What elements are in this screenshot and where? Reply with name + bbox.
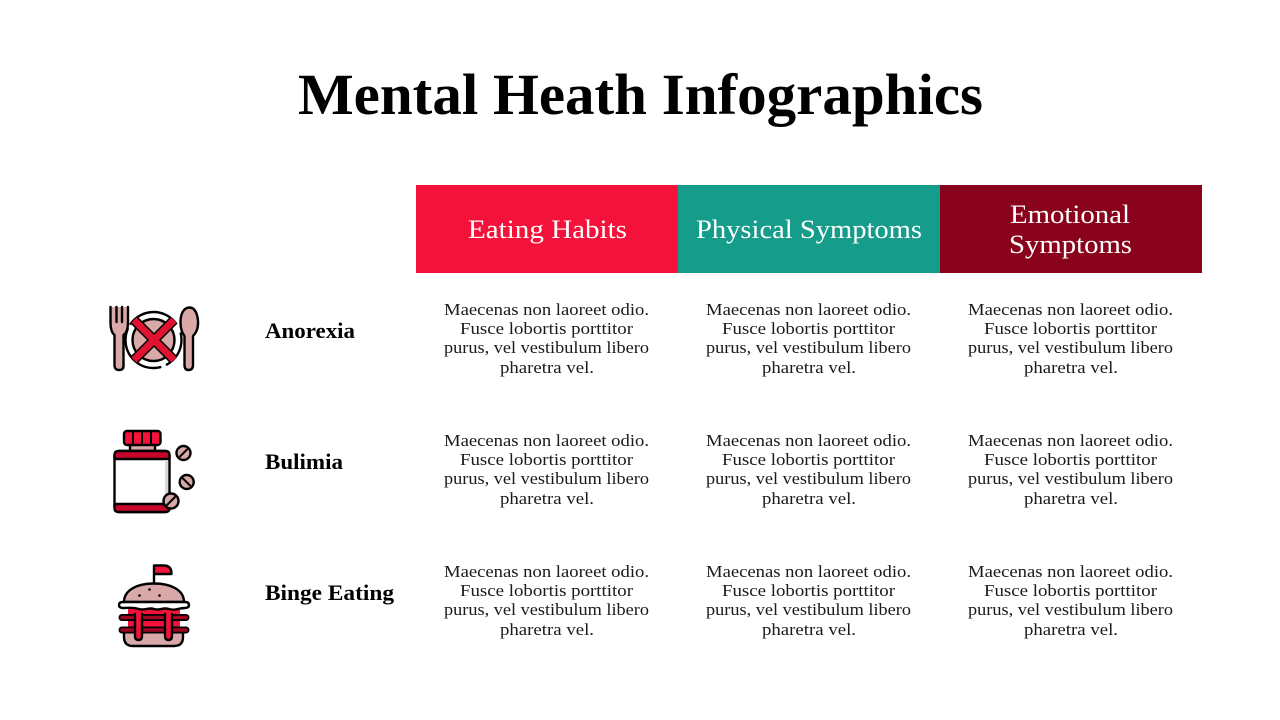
text: Binge Eating, Eating Habits: Fusce lobortis porttitor <box>460 581 633 600</box>
text: Binge Eating, Emotional Symptoms <box>968 562 1173 639</box>
text: Bulimia, Physical Symptoms <box>706 431 911 508</box>
text: Bulimia, Physical Symptoms: Fusce lobortis porttitor <box>722 450 895 469</box>
text: Bulimia, Emotional Symptoms: Fusce lobortis porttitor <box>984 450 1157 469</box>
text: Binge Eating, Physical Symptoms: Fusce lobortis porttitor <box>722 581 895 600</box>
column header: Emotional Symptoms <box>940 185 1202 273</box>
text: Binge Eating, Physical Symptoms: purus, vel vestibulum libero <box>706 600 911 619</box>
text: Binge Eating, Physical Symptoms: Maecenas non laoreet odio. <box>706 562 911 581</box>
text: Bulimia, Emotional Symptoms: purus, vel vestibulum libero <box>968 469 1173 488</box>
text: Anorexia, Eating Habits: Fusce lobortis porttitor <box>460 319 633 338</box>
text: Anorexia, Eating Habits: pharetra vel. <box>500 358 594 377</box>
row label: Binge Eating: Binge Eating <box>265 580 394 605</box>
text: Anorexia, Physical Symptoms: Fusce lobortis porttitor <box>722 319 895 338</box>
text: Binge Eating, Emotional Symptoms: pharetra vel. <box>1024 620 1118 639</box>
text: Bulimia, Eating Habits: Maecenas non laoreet odio. <box>444 431 649 450</box>
row label: Anorexia: Anorexia <box>265 318 355 343</box>
text: Bulimia, Emotional Symptoms: pharetra vel. <box>1024 489 1118 508</box>
text: Bulimia, Physical Symptoms: pharetra vel. <box>762 489 856 508</box>
text: Bulimia, Eating Habits <box>444 431 649 508</box>
text: Anorexia, Physical Symptoms <box>706 300 911 377</box>
column header: Emotional Symptoms: Symptoms <box>1009 229 1132 259</box>
text: Binge Eating, Emotional Symptoms: Maecenas non laoreet odio. <box>968 562 1173 581</box>
text: Binge Eating, Eating Habits: purus, vel vestibulum libero <box>444 600 649 619</box>
column header: Physical Symptoms: Physical Symptoms <box>696 214 922 244</box>
text: Bulimia, Eating Habits: purus, vel vestibulum libero <box>444 469 649 488</box>
text: Bulimia, Emotional Symptoms: Maecenas non laoreet odio. <box>968 431 1173 450</box>
title: Mental Heath Infographics <box>298 62 983 127</box>
text: Anorexia, Physical Symptoms: purus, vel vestibulum libero <box>706 338 911 357</box>
icon: pill bottle with pills <box>114 431 194 512</box>
text: Binge Eating, Emotional Symptoms: purus, vel vestibulum libero <box>968 600 1173 619</box>
text: Binge Eating, Eating Habits: pharetra vel. <box>500 620 594 639</box>
column header: Eating Habits: Eating Habits <box>468 214 627 244</box>
text: Bulimia, Eating Habits: pharetra vel. <box>500 489 594 508</box>
icon: crossed-out plate with fork and spoon <box>110 307 198 370</box>
text: Binge Eating, Physical Symptoms: pharetra vel. <box>762 620 856 639</box>
text: Anorexia, Emotional Symptoms: purus, vel vestibulum libero <box>968 338 1173 357</box>
text: Anorexia, Emotional Symptoms: Fusce lobortis porttitor <box>984 319 1157 338</box>
row label: Bulimia: Bulimia <box>265 449 343 474</box>
text: Anorexia, Eating Habits: Maecenas non laoreet odio. <box>444 300 649 319</box>
icon: burger with flag <box>119 566 189 646</box>
text: Anorexia, Emotional Symptoms: pharetra vel. <box>1024 358 1118 377</box>
text: Binge Eating, Physical Symptoms <box>706 562 911 639</box>
text: Binge Eating, Eating Habits: Maecenas non laoreet odio. <box>444 562 649 581</box>
text: Bulimia, Eating Habits: Fusce lobortis porttitor <box>460 450 633 469</box>
text: Anorexia, Emotional Symptoms: Maecenas non laoreet odio. <box>968 300 1173 319</box>
column header: Physical Symptoms <box>678 185 940 273</box>
text: Anorexia, Physical Symptoms: Maecenas non laoreet odio. <box>706 300 911 319</box>
text: Bulimia, Physical Symptoms: purus, vel vestibulum libero <box>706 469 911 488</box>
text: Anorexia, Physical Symptoms: pharetra vel. <box>762 358 856 377</box>
column header: Eating Habits <box>416 185 678 273</box>
column header: Emotional Symptoms: Emotional <box>1010 199 1130 229</box>
text: Binge Eating, Emotional Symptoms: Fusce lobortis porttitor <box>984 581 1157 600</box>
text: Anorexia, Emotional Symptoms <box>968 300 1173 377</box>
text: Binge Eating, Eating Habits <box>444 562 649 639</box>
text: Bulimia, Physical Symptoms: Maecenas non laoreet odio. <box>706 431 911 450</box>
text: Anorexia, Eating Habits: purus, vel vestibulum libero <box>444 338 649 357</box>
text: Anorexia, Eating Habits <box>444 300 649 377</box>
text: Bulimia, Emotional Symptoms <box>968 431 1173 508</box>
